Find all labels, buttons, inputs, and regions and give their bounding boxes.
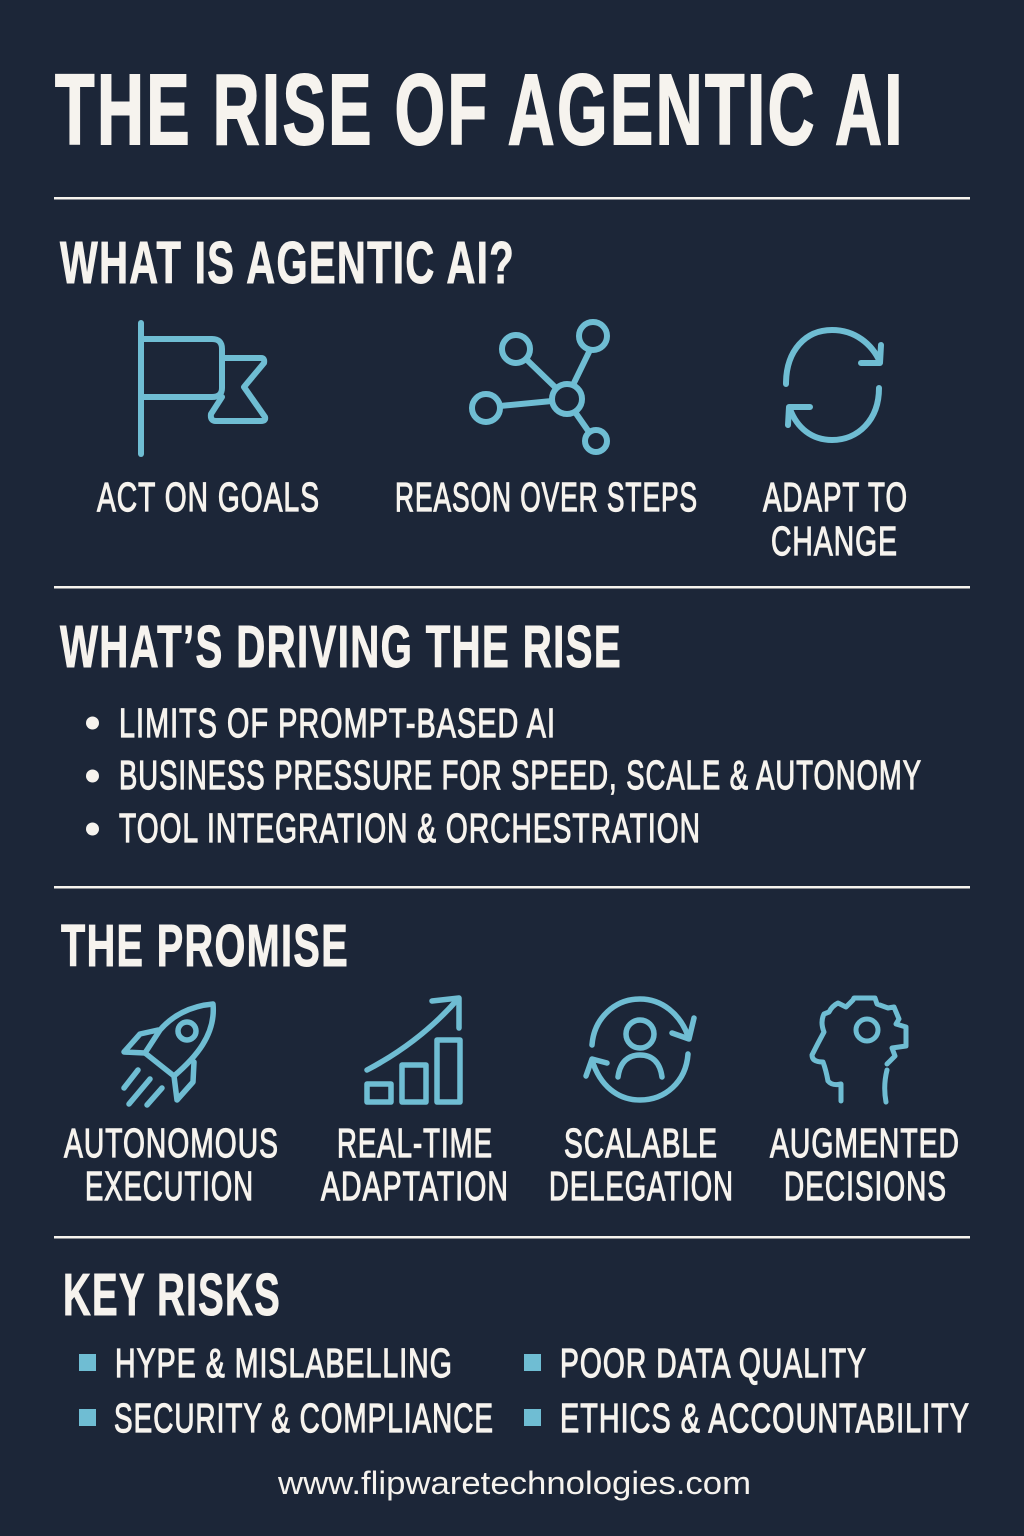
label: adapt to change [763,474,908,564]
risk item: poor data quality: POOR DATA QUALITY [560,1340,867,1386]
icon: flag [141,323,265,454]
heading: what's driving the rise: WHAT’S DRIVING THE RISE [60,614,622,680]
bullet item 1: LIMITS OF PROMPT-BASED AI [119,700,556,746]
label: autonomous execution: EXECUTION [85,1163,254,1209]
panel: what is agentic AI [60,230,908,564]
label: scalable delegation: DELEGATION [549,1163,734,1209]
icon: person in cycle [586,999,694,1100]
label: autonomous execution [64,1120,279,1209]
label: act on goals: ACT ON GOALS [97,474,320,520]
heading: the promise: THE PROMISE [61,913,349,979]
heading: key risks: KEY RISKS [63,1262,281,1328]
bullet item 3 [86,805,701,851]
panel: the promise [61,913,960,1209]
icon: network nodes [472,322,607,452]
panel: key risks [63,1262,970,1441]
label: augmented decisions: DECISIONS [784,1163,947,1209]
footer url: www.flipwaretechnologies.com [277,1465,751,1501]
bullet item 1 [86,700,556,746]
label: scalable delegation [549,1120,734,1209]
risk item: security and compliance [79,1395,494,1441]
label: real-time adaptation [321,1120,509,1209]
label: scalable delegation: SCALABLE [564,1120,718,1166]
panel: what's driving the rise [60,614,922,851]
label: reason over steps: REASON OVER STEPS [395,474,698,520]
label: real-time adaptation: REAL-TIME [337,1120,493,1166]
heading: what is agentic AI: WHAT IS AGENTIC AI? [60,230,515,296]
label: adapt to change: CHANGE [771,518,898,564]
icon: head with gear [812,998,906,1102]
icon: growth chart [367,998,460,1102]
icon: rocket [124,1004,213,1105]
label: autonomous execution: AUTONOMOUS [64,1120,279,1166]
icon: refresh cycle [786,330,881,440]
risk item: poor data quality [524,1340,867,1386]
label: augmented decisions [770,1120,960,1209]
bullet item 3: TOOL INTEGRATION & ORCHESTRATION [119,805,701,851]
risk item: hype and mislabelling [79,1340,453,1386]
risk item: hype and mislabelling: HYPE & MISLABELLING [115,1340,453,1386]
label: adapt to change: ADAPT TO [763,474,908,520]
risk item: security and compliance: SECURITY & COMPLIANCE [114,1395,494,1441]
label: real-time adaptation: ADAPTATION [321,1163,509,1209]
